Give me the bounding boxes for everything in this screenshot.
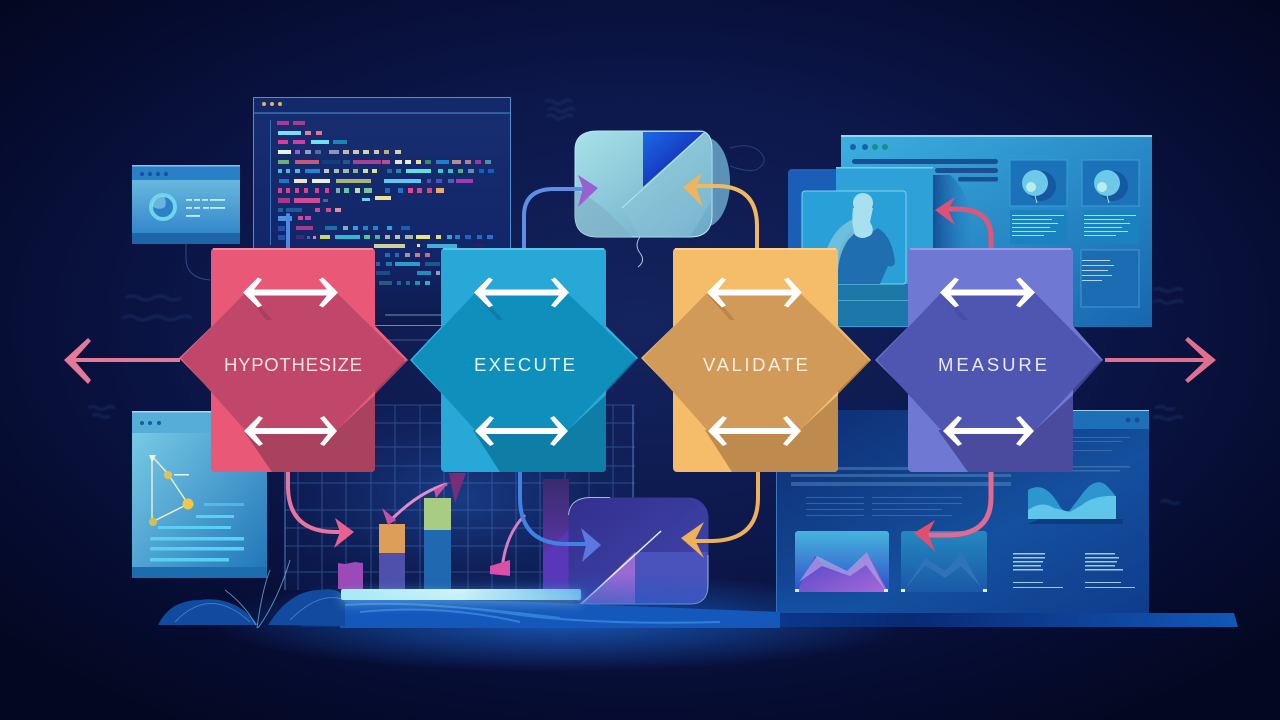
code tokens — [277, 121, 494, 285]
bar chart — [338, 479, 569, 589]
double arrow — [244, 416, 337, 446]
person card — [802, 191, 906, 284]
stacked back cards — [788, 167, 933, 327]
chart: teal peaks — [901, 531, 987, 592]
chart: area — [1028, 482, 1123, 524]
label: VALIDATE — [703, 354, 808, 375]
panel: light triangle card — [575, 131, 764, 267]
panel: bottom-right dashboard — [776, 410, 1149, 613]
stage: measure — [875, 248, 1103, 472]
panel: grid chart backdrop — [285, 405, 635, 590]
double arrow — [707, 278, 802, 308]
panel: code editor window — [254, 98, 510, 340]
doc text lines — [150, 503, 244, 562]
dashboard text blocks — [1013, 553, 1135, 588]
panel: browser window right — [788, 135, 1152, 327]
panel: small status window — [132, 165, 240, 280]
left outflow arrow — [64, 338, 180, 384]
double arrow — [943, 416, 1034, 446]
dashboard text rows — [791, 437, 1130, 516]
stage: validate — [641, 248, 871, 472]
double arrow — [940, 278, 1035, 308]
label: MEASURE — [938, 354, 1047, 375]
text cards — [1010, 210, 1139, 307]
panel: purple triangle card — [568, 498, 708, 604]
double arrow — [708, 416, 801, 446]
stage: execute — [410, 248, 638, 472]
image cards — [1010, 160, 1139, 206]
stage: hypothesize — [179, 248, 408, 472]
panel: document with graph — [132, 411, 267, 578]
background squiggles — [88, 100, 1183, 504]
double arrow — [475, 416, 568, 446]
double arrow — [474, 278, 569, 308]
connector arrowheads — [334, 173, 955, 562]
chart: purple peaks — [795, 531, 889, 592]
label: EXECUTE — [474, 354, 575, 375]
double arrow — [243, 278, 338, 308]
pink chart arrows — [382, 473, 525, 576]
glowing floor and waves — [150, 560, 1238, 672]
label: HYPOTHESIZE — [224, 354, 362, 375]
connector arrows behind the stages — [288, 186, 991, 544]
right outflow arrow — [1105, 337, 1216, 383]
graph diagram — [149, 455, 194, 526]
